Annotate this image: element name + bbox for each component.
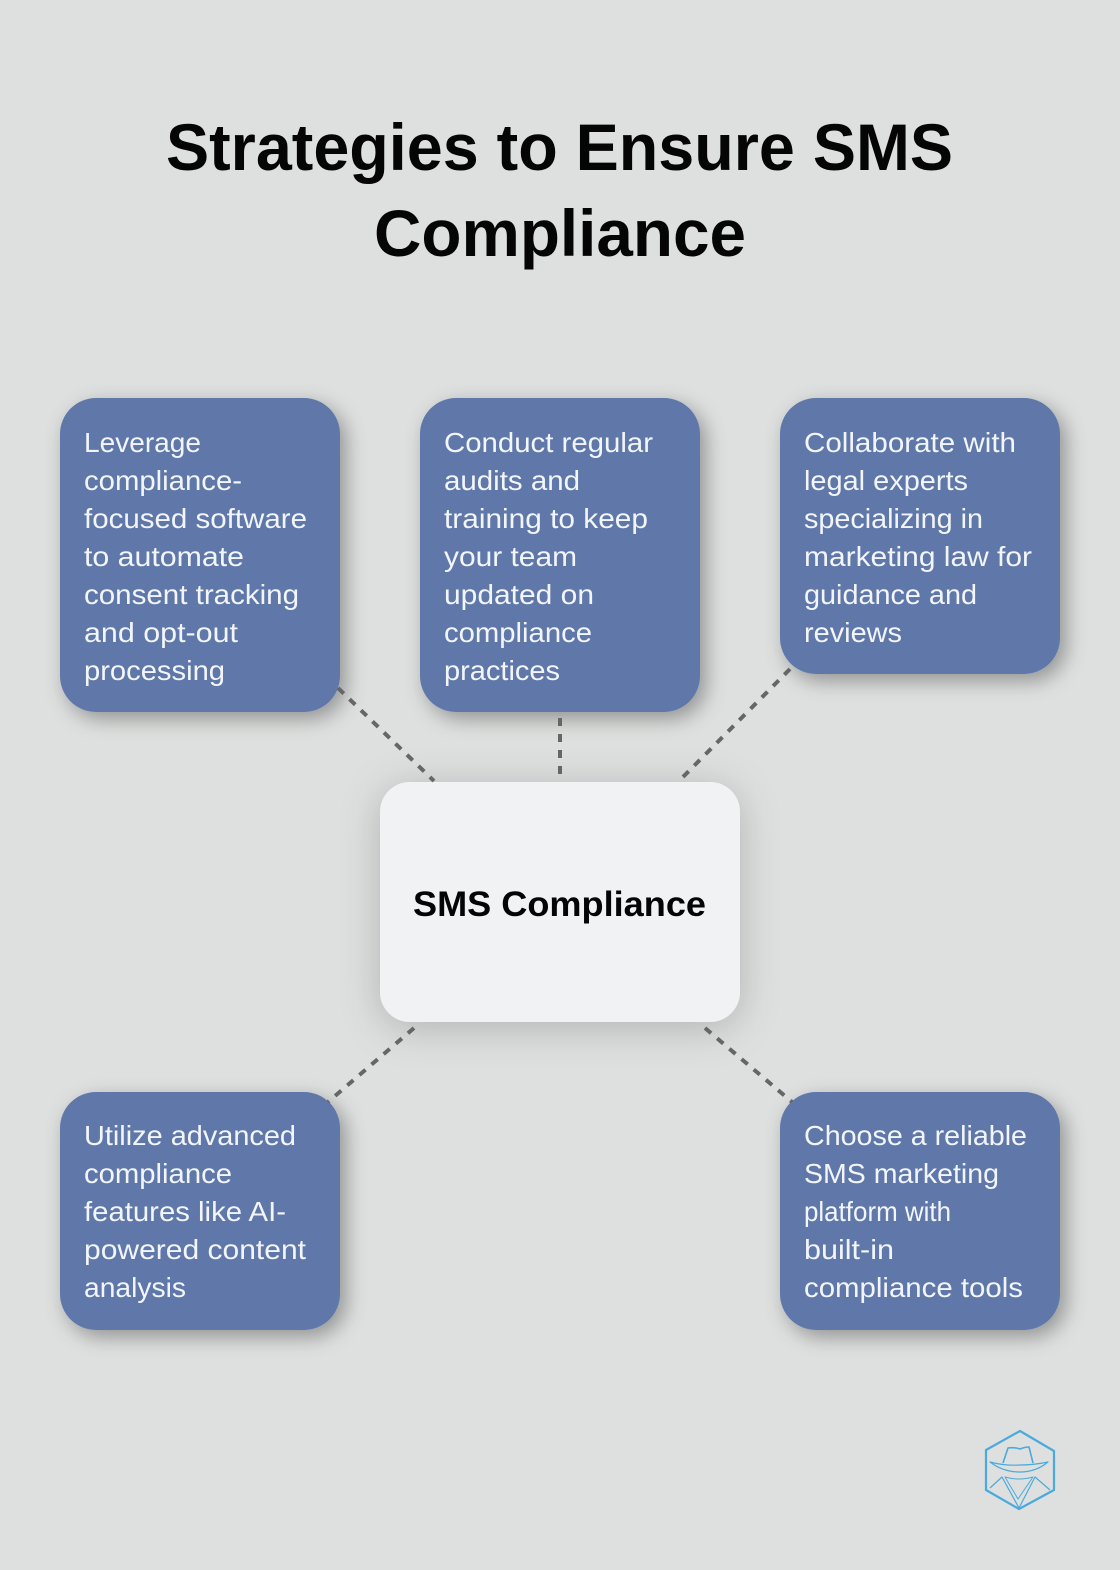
panel: legal experts: reviews	[804, 617, 902, 648]
panel: advanced compliance features	[60, 1092, 340, 1330]
center panel: SMS Compliance	[380, 782, 740, 1022]
panel: compliance-focused software: Leverage	[84, 427, 201, 458]
connector: top middle	[558, 718, 562, 777]
panel: compliance-focused software	[60, 398, 340, 712]
title: Strategies to Ensure SMS	[166, 110, 953, 184]
panel: audits and training: Conduct regular	[444, 427, 653, 458]
panel: advanced compliance features: features like AI-	[84, 1196, 286, 1227]
connector: top right	[680, 669, 790, 780]
connector: bottom left	[328, 1028, 414, 1102]
panel: legal experts: Collaborate with	[804, 427, 1016, 458]
panel: audits and training: practices	[444, 655, 560, 686]
panel: reliable platform: built-in	[804, 1234, 894, 1265]
connector: bottom right	[705, 1028, 792, 1102]
panel: compliance-focused software: processing	[84, 655, 225, 686]
center panel: SMS Compliance: SMS Compliance	[413, 885, 706, 924]
panel: audits and training: your team	[444, 541, 577, 572]
panel: reliable platform: compliance tools	[804, 1272, 1023, 1303]
panel: audits and training: updated on	[444, 579, 594, 610]
panel: compliance-focused software: compliance-	[84, 465, 242, 496]
panel: legal experts: legal experts	[804, 465, 968, 496]
panel: advanced compliance features: Utilize advanced	[84, 1120, 296, 1151]
panel: audits and training: training to keep	[444, 503, 648, 534]
panel: compliance-focused software: to automate	[84, 541, 244, 572]
panel: advanced compliance features: compliance	[84, 1158, 232, 1189]
panel: advanced compliance features: analysis	[84, 1272, 186, 1303]
connector: top left	[338, 688, 434, 781]
panel: audits and training: audits and	[444, 465, 580, 496]
panel: compliance-focused software: and opt-out	[84, 617, 238, 648]
panel: legal experts	[780, 398, 1060, 674]
title	[166, 110, 953, 270]
panel: reliable platform: Choose a reliable	[804, 1120, 1027, 1151]
panel: legal experts: specializing in	[804, 503, 983, 534]
title: Compliance	[374, 196, 746, 270]
panel: advanced compliance features: powered content	[84, 1234, 306, 1265]
panel: legal experts: marketing law for	[804, 541, 1032, 572]
panel: compliance-focused software: focused software	[84, 503, 307, 534]
panel: reliable platform: platform with	[804, 1196, 951, 1227]
panel: audits and training: compliance	[444, 617, 592, 648]
panel: reliable platform	[780, 1092, 1060, 1330]
panel: compliance-focused software: consent tracking	[84, 579, 299, 610]
icon: hexagon logo with hat	[986, 1431, 1054, 1509]
panel: reliable platform: SMS marketing	[804, 1158, 999, 1189]
panel: audits and training	[420, 398, 700, 712]
panel: legal experts: guidance and	[804, 579, 977, 610]
